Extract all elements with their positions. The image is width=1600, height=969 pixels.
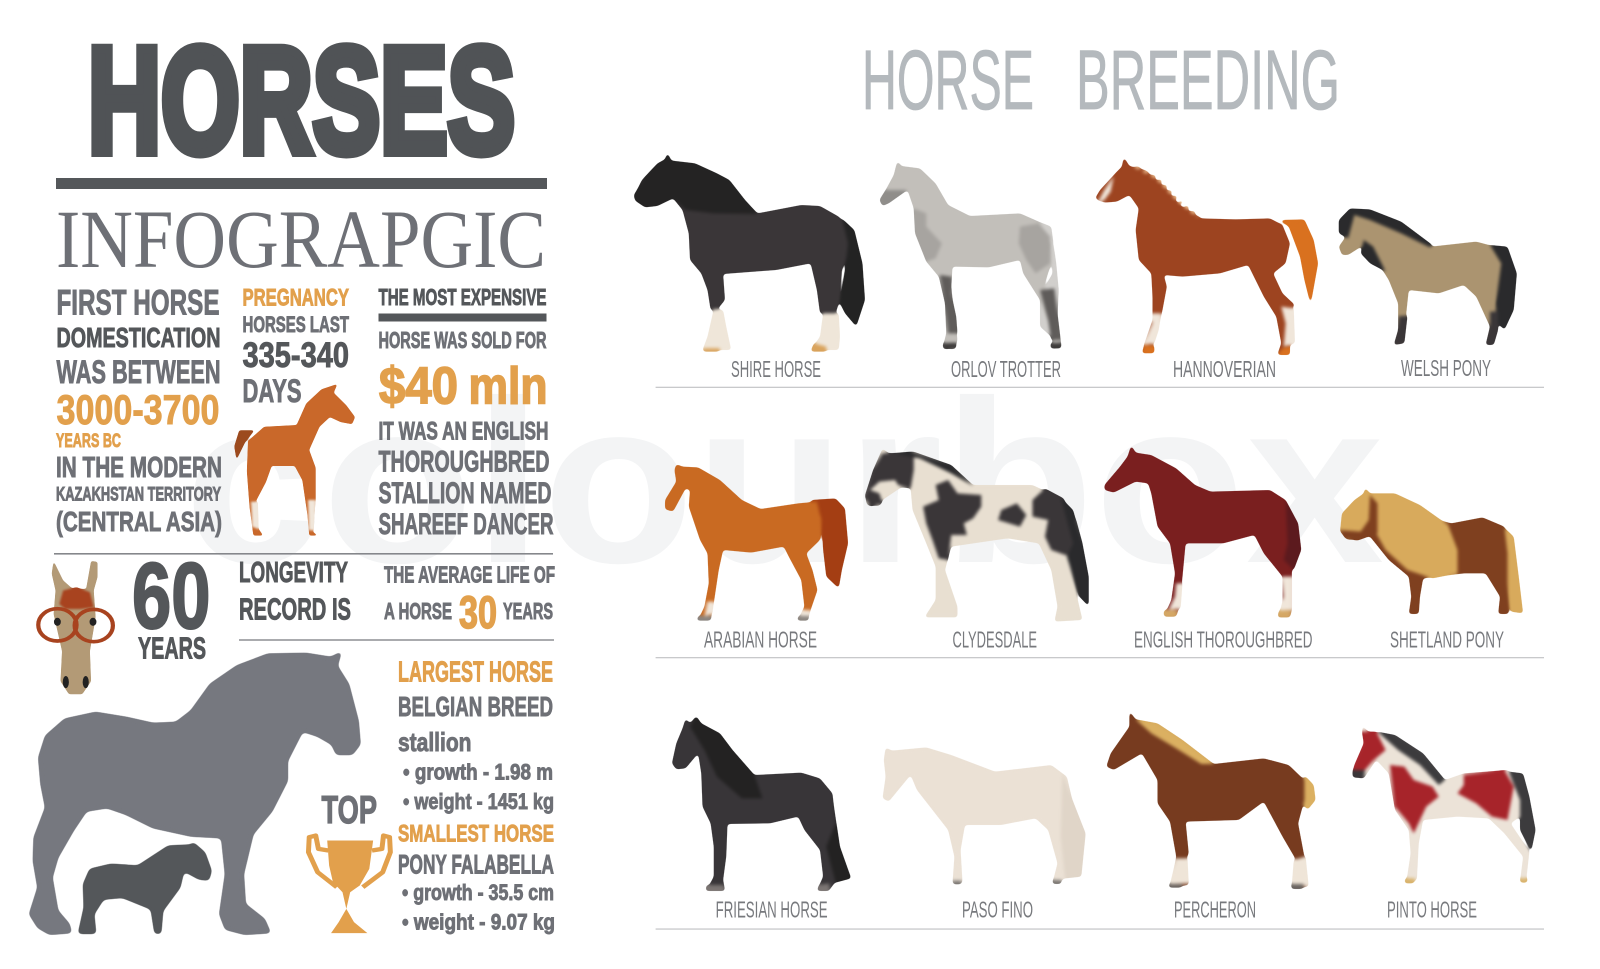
label: percheron: PERCHERON bbox=[1174, 897, 1256, 923]
text block: first horse domestication: WAS BETWEEN bbox=[56, 354, 220, 390]
horse: percheron bbox=[1106, 711, 1316, 889]
heading rule bbox=[56, 178, 547, 189]
icon: large horse silhouette bbox=[30, 653, 360, 934]
horse: shire horse bbox=[634, 153, 865, 352]
text block: longevity record bbox=[239, 557, 351, 626]
horse: arabian horse bbox=[665, 464, 848, 621]
horse: pinto horse bbox=[1352, 725, 1536, 883]
text block: most expensive: SHAREEF DANCER bbox=[378, 508, 554, 541]
label: clydesdale: CLYDESDALE bbox=[952, 627, 1037, 653]
horse: orlov trotter bbox=[879, 161, 1061, 349]
text block: longevity record: RECORD IS bbox=[239, 592, 351, 626]
horse: english thoroughbred bbox=[1104, 445, 1301, 617]
horse: clydesdale bbox=[865, 448, 1089, 622]
label: welsh pony: WELSH PONY bbox=[1401, 355, 1491, 381]
text block: largest horse bbox=[398, 656, 554, 814]
text block: smallest horse bbox=[398, 821, 555, 934]
label: arabian horse: ARABIAN HORSE bbox=[704, 627, 817, 653]
heading: horse breeding bbox=[862, 33, 1340, 127]
stat: 60 years: 60 bbox=[132, 543, 210, 648]
horse: hannoverian bbox=[1095, 157, 1318, 355]
label: hannoverian: HANNOVERIAN bbox=[1173, 356, 1276, 382]
text block: longevity record: LONGEVITY bbox=[239, 557, 348, 589]
text block: smallest horse: • weight - 9.07 kg bbox=[402, 910, 555, 934]
text block: first horse domestication bbox=[56, 283, 222, 537]
text block: most expensive bbox=[378, 284, 554, 541]
text block: smallest horse: PONY FALABELLA bbox=[398, 850, 554, 880]
text block: first horse domestication: (CENTRAL ASIA) bbox=[56, 506, 222, 537]
label: orlov trotter: ORLOV TROTTER bbox=[951, 356, 1061, 382]
text block: first horse domestication: DOMESTICATION bbox=[56, 322, 220, 353]
text block: largest horse: BELGIAN BREED bbox=[398, 691, 553, 722]
text block: pregnancy bbox=[242, 285, 349, 409]
text block: most expensive: THE MOST EXPENSIVE bbox=[378, 284, 546, 310]
horse: welsh pony bbox=[1339, 208, 1517, 345]
text block: first horse domestication: 3000-3700 bbox=[56, 386, 220, 433]
heading: horse breeding: HORSE bbox=[862, 33, 1034, 127]
text block: first horse domestication: YEARS BC bbox=[56, 430, 121, 452]
horse: paso fino bbox=[882, 747, 1086, 884]
text block: largest horse: stallion bbox=[398, 727, 472, 757]
text block: pregnancy: DAYS bbox=[242, 372, 302, 409]
text block: most expensive: mln bbox=[468, 358, 548, 416]
text block: most expensive: STALLION NAMED bbox=[378, 477, 552, 510]
label: english thoroughbred: ENGLISH THOROUGHBRED bbox=[1134, 627, 1312, 653]
text block: largest horse: • weight - 1451 kg bbox=[403, 789, 554, 814]
icon: horse head with glasses bbox=[38, 561, 113, 694]
label: pinto horse: PINTO HORSE bbox=[1387, 897, 1477, 923]
text block: pregnancy: 335-340 bbox=[242, 336, 349, 375]
horse: shetland pony bbox=[1340, 487, 1523, 614]
text block: first horse domestication: IN THE MODERN bbox=[56, 452, 222, 484]
text block: most expensive: $40 bbox=[379, 358, 458, 416]
text block: most expensive: THOROUGHBRED bbox=[378, 445, 550, 478]
text block: most expensive: IT WAS AN ENGLISH bbox=[378, 417, 548, 445]
text block: average life: 30 bbox=[459, 587, 497, 638]
text block: largest horse: • growth - 1.98 m bbox=[403, 759, 553, 784]
text block: pregnancy: PREGNANCY bbox=[242, 285, 349, 312]
label: shire horse: SHIRE HORSE bbox=[731, 356, 821, 382]
stat: 60 years: YEARS bbox=[138, 630, 206, 666]
subtitle: infograpgic: INFOGRAPGIC bbox=[56, 193, 546, 285]
text block: first horse domestication: FIRST HORSE bbox=[56, 283, 220, 322]
text block: first horse domestication: KAZAKHSTAN TERRITORY bbox=[56, 485, 221, 506]
label: top: TOP bbox=[322, 789, 377, 832]
label: paso fino: PASO FINO bbox=[962, 897, 1033, 923]
label: shetland pony: SHETLAND PONY bbox=[1390, 627, 1504, 653]
stat: 60 years bbox=[132, 543, 210, 666]
text block: smallest horse: SMALLEST HORSE bbox=[398, 821, 554, 848]
text block: most expensive: HORSE WAS SOLD FOR bbox=[378, 327, 547, 353]
heading: horse breeding: BREEDING bbox=[1076, 33, 1340, 127]
icon: small pony silhouette bbox=[78, 843, 211, 934]
text block: average life bbox=[384, 562, 555, 638]
text block: average life: THE AVERAGE LIFE OF bbox=[384, 562, 555, 588]
icon: trophy bbox=[308, 836, 390, 933]
label: friesian horse: FRIESIAN HORSE bbox=[716, 897, 828, 923]
icon: foal bbox=[234, 384, 355, 536]
title: horses: HORSES bbox=[88, 16, 515, 184]
text block: pregnancy: HORSES LAST bbox=[242, 312, 349, 337]
text block: largest horse: LARGEST HORSE bbox=[398, 656, 553, 688]
text block: average life: A HORSE bbox=[384, 598, 452, 624]
text block: average life: YEARS bbox=[503, 598, 553, 624]
watermark: colourbox bbox=[184, 353, 1384, 612]
text block: smallest horse: • growth - 35.5 cm bbox=[402, 880, 554, 905]
horse: friesian horse bbox=[672, 716, 851, 891]
